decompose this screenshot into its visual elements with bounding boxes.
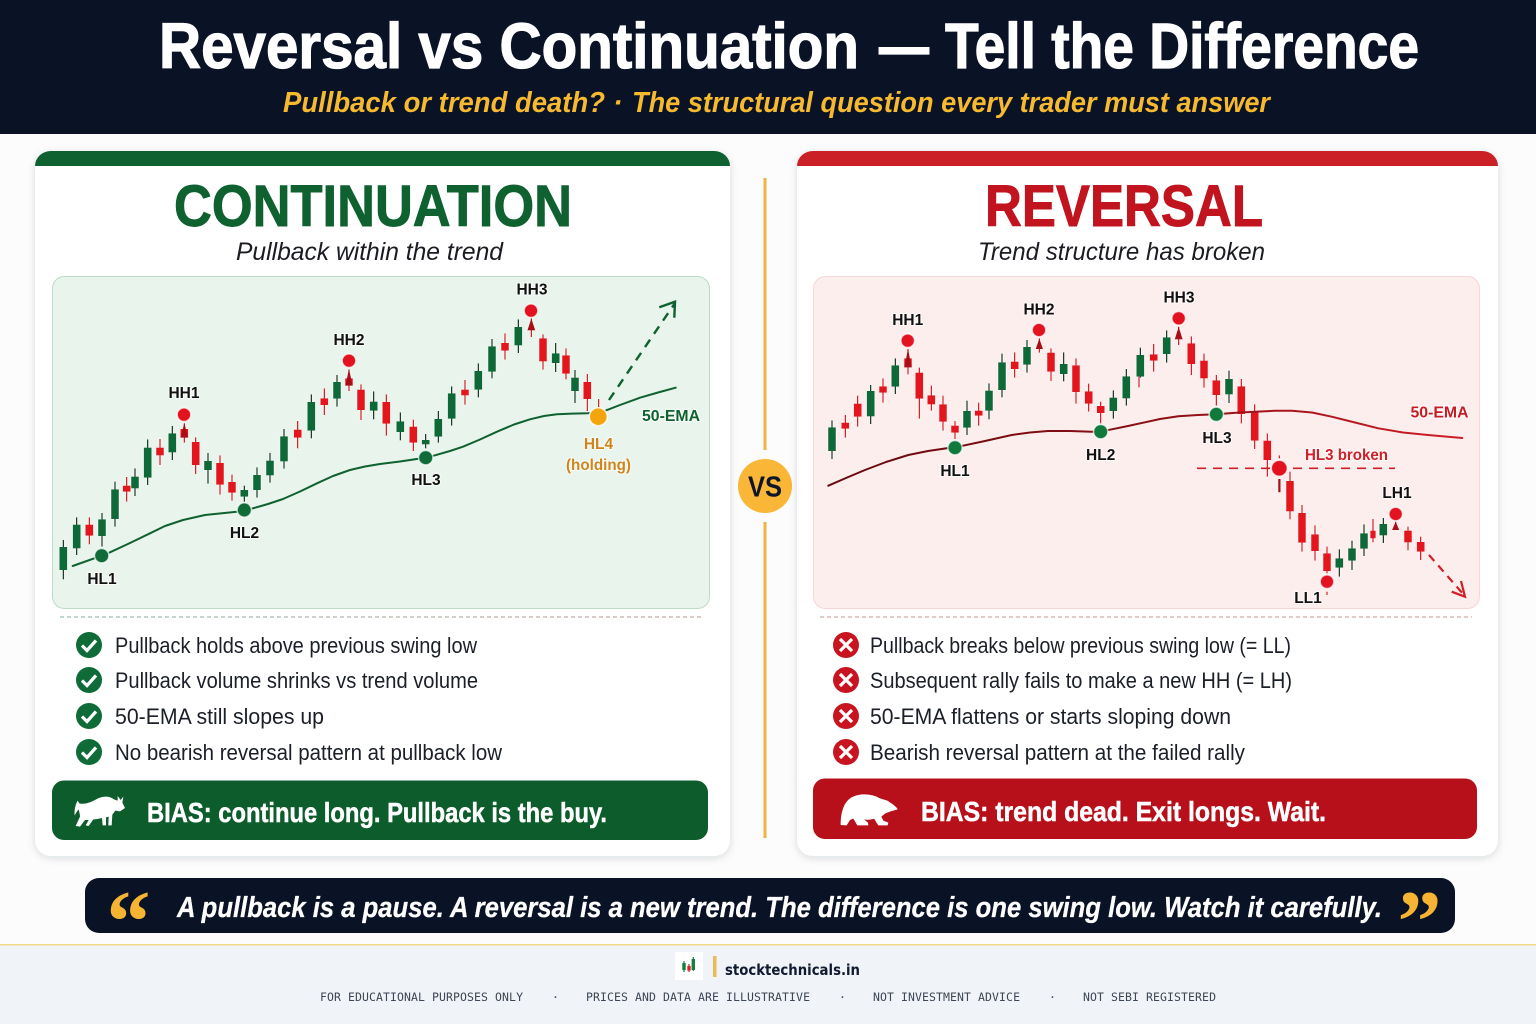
checklist: reversal: Bearish reversal pattern at the failed rally	[870, 740, 1245, 765]
disclaimer: ·	[552, 990, 559, 1004]
panel: continuation	[35, 151, 730, 856]
quote banner: A pullback is a pause. A reversal is a new trend. The difference is one swing low. Watch it carefully.	[176, 892, 1382, 924]
subtitle	[283, 87, 1272, 119]
HL3 broken dashed level	[1197, 467, 1395, 469]
subtitle: The structural question every trader must answer	[632, 87, 1272, 119]
chart: continuation candlesticks	[52, 276, 710, 608]
swing markers and labels: HH2	[1023, 302, 1055, 318]
checklist: continuation: Pullback volume shrinks vs trend volume	[115, 668, 478, 693]
check icon 1	[76, 632, 102, 658]
vs divider: VS	[748, 472, 782, 504]
swing markers and labels: 50-EMA	[642, 408, 700, 425]
disclaimer: ·	[1049, 990, 1056, 1004]
swing markers and labels: 50-EMA	[1410, 404, 1468, 422]
check icon 4	[76, 739, 102, 765]
opening quote mark: “	[106, 874, 150, 971]
swing markers and labels: LL1	[1294, 590, 1322, 607]
disclaimer: FOR EDUCATIONAL PURPOSES ONLY	[320, 990, 523, 1004]
title: Tell the Difference	[945, 10, 1419, 82]
swing markers and labels	[892, 290, 1468, 607]
title	[159, 10, 1419, 82]
swing markers and labels: HH2	[333, 332, 365, 349]
checklist: reversal: Subsequent rally fails to make a new HH (= LH)	[870, 668, 1292, 693]
checklist: reversal	[833, 632, 1292, 765]
chart: reversal candlesticks	[814, 276, 1480, 608]
swing markers and labels: LH1	[1382, 485, 1412, 502]
disclaimer	[320, 990, 1216, 1004]
heading: reversal: REVERSAL	[985, 174, 1263, 239]
swing markers and labels: HL4	[584, 436, 614, 453]
dashed continuation arrow	[609, 302, 675, 400]
swing markers and labels: HL3	[411, 472, 441, 489]
icon: bear	[841, 794, 898, 825]
disclaimer: PRICES AND DATA ARE ILLUSTRATIVE	[586, 990, 810, 1004]
checklist: reversal: 50-EMA flattens or starts sloping down	[870, 704, 1231, 729]
checklist: reversal: Pullback breaks below previous swing low (= LL)	[870, 633, 1291, 658]
disclaimer: NOT SEBI REGISTERED	[1083, 990, 1216, 1004]
subheading: reversal: Trend structure has broken	[978, 238, 1265, 266]
title: Reversal vs Continuation	[159, 10, 859, 82]
cross icon 4	[833, 739, 859, 765]
subtitle: ·	[613, 87, 623, 119]
brand name: stocktechnicals.in	[725, 961, 860, 979]
candles left part	[63, 369, 374, 579]
checklist: continuation: Pullback holds above previous swing low	[115, 633, 477, 658]
swing markers and labels: HL3	[1202, 430, 1232, 447]
panel: reversal	[797, 151, 1498, 856]
subtitle: Pullback or trend death?	[283, 87, 605, 119]
candles left part	[832, 338, 1140, 459]
footer	[0, 944, 1536, 1024]
swing markers and labels: HL1	[940, 463, 970, 480]
bias bar: reversal	[813, 778, 1477, 839]
disclaimer: NOT INVESTMENT ADVICE	[873, 990, 1020, 1004]
check icon 3	[76, 703, 102, 729]
swing markers and labels: HH1	[168, 385, 200, 402]
title: —	[879, 10, 929, 82]
candles right part	[1154, 327, 1421, 595]
swing markers and labels: HL2	[1086, 447, 1115, 464]
swing markers and labels: HL2	[230, 525, 259, 542]
bias bar: continuation: BIAS: continue long. Pullback is the buy.	[147, 797, 607, 828]
cross icon 2	[833, 667, 859, 693]
candles right part	[386, 318, 599, 451]
50-EMA line	[828, 411, 1462, 486]
quote banner	[85, 874, 1455, 971]
50-EMA line	[73, 388, 676, 566]
swing markers and labels: HL1	[87, 571, 117, 588]
dashed reversal arrow	[1429, 555, 1465, 597]
closing quote mark: ”	[1398, 874, 1442, 971]
checklist: continuation: No bearish reversal pattern at pullback low	[115, 740, 502, 765]
disclaimer: ·	[839, 990, 846, 1004]
bias bar: continuation	[52, 780, 708, 840]
cross icon 3	[833, 703, 859, 729]
swing markers and labels: (holding)	[566, 457, 631, 474]
vs divider	[738, 178, 792, 838]
header band	[0, 0, 1536, 134]
subheading: continuation: Pullback within the trend	[236, 238, 504, 266]
check icon 2	[76, 667, 102, 693]
swing markers and labels: HL3 broken	[1305, 447, 1388, 464]
checklist: continuation: 50-EMA still slopes up	[115, 704, 324, 729]
bias bar: reversal: BIAS: trend dead. Exit longs. Wait.	[921, 796, 1326, 827]
logo: candlesticks	[675, 952, 703, 980]
checklist: continuation	[76, 632, 502, 765]
swing markers and labels	[87, 282, 700, 588]
icon: bull	[75, 796, 125, 827]
heading: continuation: CONTINUATION	[174, 174, 572, 239]
swing markers and labels: HH3	[1163, 290, 1195, 306]
cross icon 1	[833, 632, 859, 658]
swing markers and labels: HH1	[892, 312, 924, 329]
swing markers and labels: HH3	[516, 282, 548, 298]
